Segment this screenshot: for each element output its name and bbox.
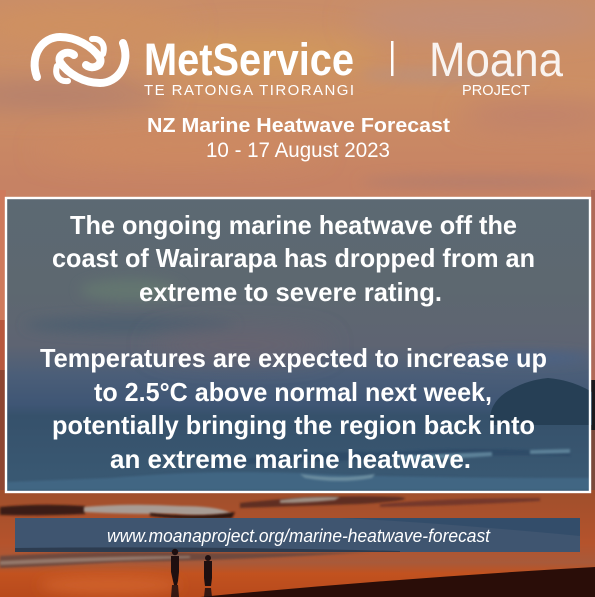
text block: outlook: Temperatures are expected to increase up xyxy=(40,343,547,373)
people silhouettes xyxy=(171,549,212,597)
date: 10 - 17 August 2023 xyxy=(206,139,390,162)
website link band: www.moanaproject.org/marine-heatwave-forecast xyxy=(107,525,491,546)
background: beach xyxy=(0,490,595,597)
text block: current status: The ongoing marine heatwave off the xyxy=(70,210,517,240)
rock headland xyxy=(490,378,592,425)
logo divider xyxy=(391,41,394,76)
panel: key message box xyxy=(5,197,592,493)
text block: outlook xyxy=(40,343,547,474)
text block: outlook: potentially bringing the region back into xyxy=(52,410,535,440)
text block: current status: coast of Wairarapa has dropped from an xyxy=(52,243,535,273)
logo: Te Ratonga Tirorangi tagline: TE RATONGA TIRORANGI xyxy=(144,82,354,99)
logo: Project tagline: PROJECT xyxy=(462,83,530,99)
text block: outlook: to 2.5°C above normal next week, xyxy=(94,377,492,407)
text block: current status xyxy=(52,210,535,307)
logo: Moana wordmark: Moana xyxy=(429,34,563,87)
heading: NZ Marine Heatwave Forecast xyxy=(147,115,450,137)
website link band xyxy=(15,518,580,552)
text block: outlook: an extreme marine heatwave. xyxy=(110,444,471,474)
text block: current status: extreme to severe rating. xyxy=(139,277,442,307)
logo: MetService koru mark xyxy=(35,37,125,83)
logo: MetService wordmark: MetService xyxy=(144,34,354,85)
